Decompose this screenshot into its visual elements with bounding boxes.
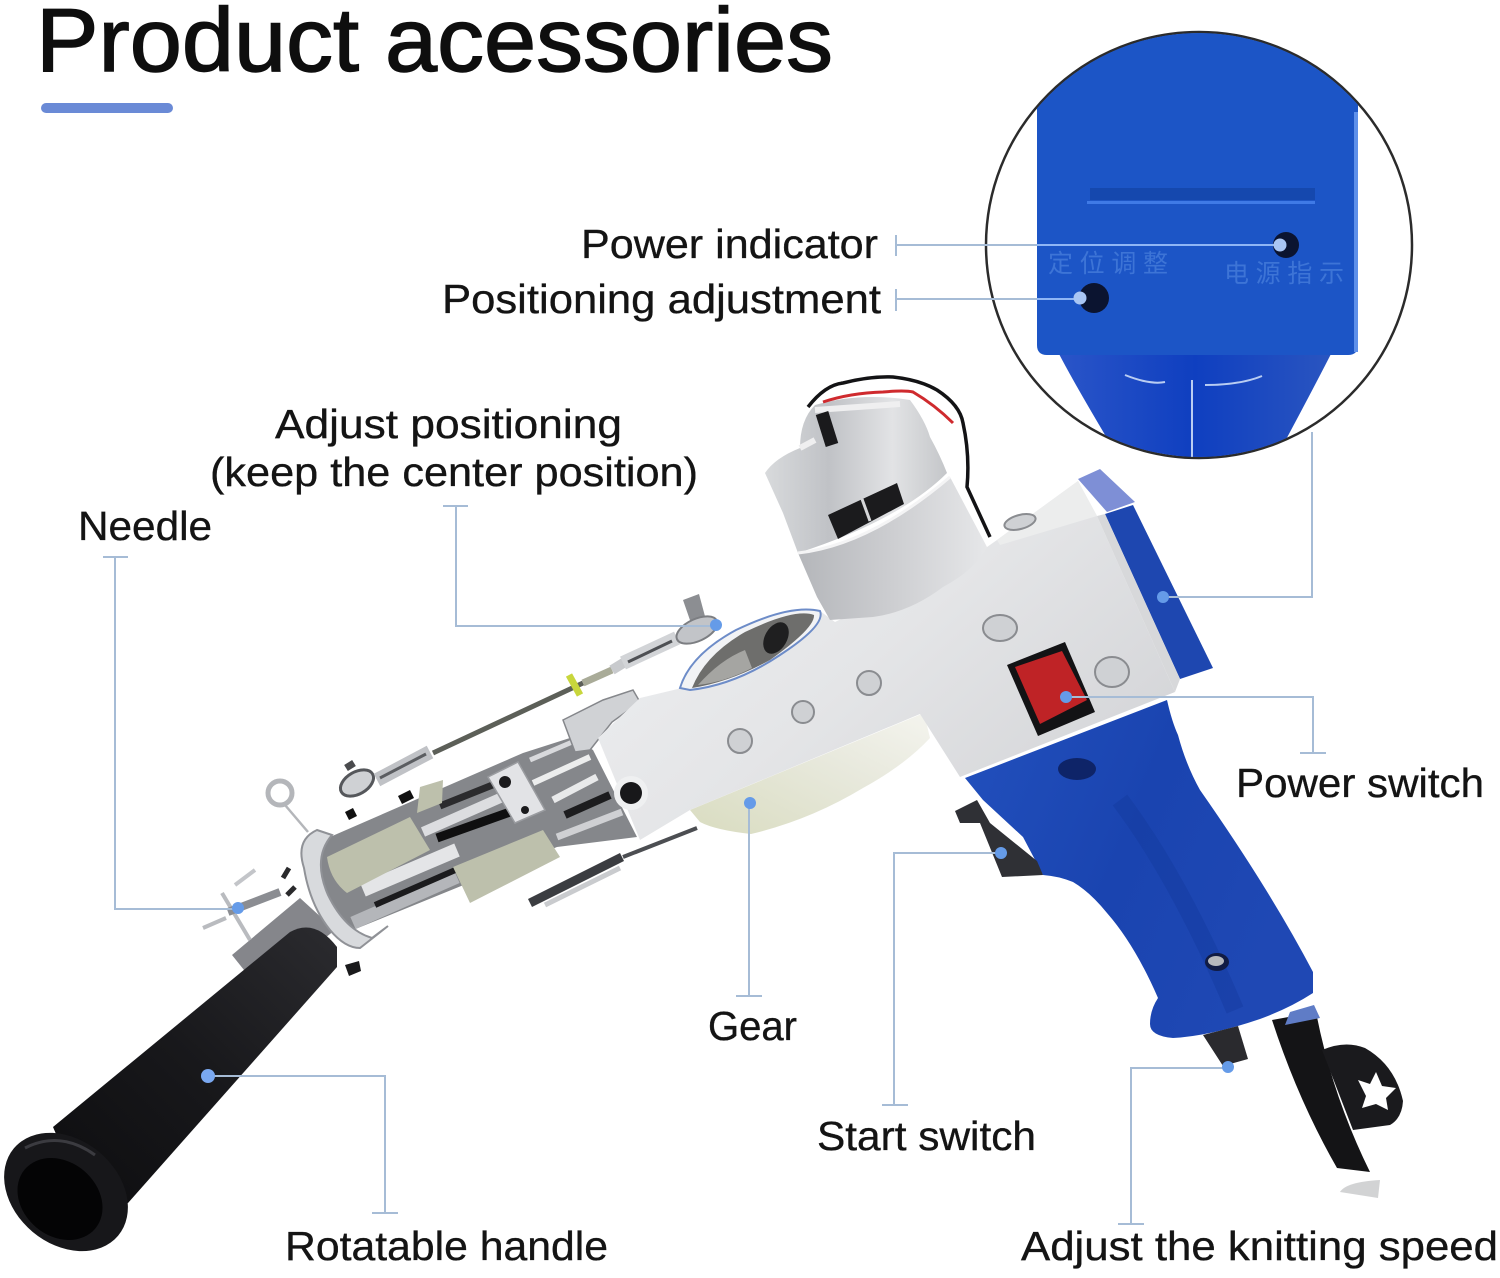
mechanism interior — [317, 737, 637, 930]
beige rollers — [327, 780, 560, 903]
motor — [765, 397, 987, 620]
lower rod — [530, 828, 697, 905]
callout: positioning adjustment — [442, 276, 1086, 322]
callout: start switch — [817, 847, 1036, 1159]
upper rod linkage — [336, 638, 677, 816]
callout: needle — [78, 503, 244, 914]
callout: power switch: Power switch — [1236, 760, 1484, 806]
red power rocker switch — [1007, 642, 1095, 736]
silver housing — [598, 481, 1175, 840]
inset: moulded text — [1049, 250, 1342, 284]
inset: cap slot — [1087, 188, 1315, 204]
adjustment slot — [680, 610, 821, 690]
front mechanism back plate — [232, 898, 335, 990]
inset: right edge highlight — [1354, 112, 1358, 352]
needle assembly — [203, 781, 308, 940]
blue end cap — [1078, 469, 1213, 692]
inset: neck highlights — [1125, 375, 1262, 460]
callout: gear — [708, 797, 797, 1049]
bracket bolt — [614, 776, 648, 810]
callout: gear: Gear — [708, 1003, 797, 1049]
power cord and strain relief — [1203, 1005, 1403, 1198]
callout: positioning adjustment: Positioning adjustment — [442, 276, 882, 322]
callout: inset link — [1157, 432, 1312, 603]
callout: adjust positioning — [210, 401, 722, 631]
callout: power indicator — [581, 221, 1286, 267]
inset: blue cap face — [1037, 20, 1358, 355]
inset: moulded text: 电源指示 — [1224, 260, 1344, 288]
callout: power indicator: Power indicator — [581, 221, 878, 267]
trigger — [955, 800, 1043, 877]
title underline accent — [41, 103, 173, 113]
callout: adjust the knitting speed — [1021, 1061, 1498, 1269]
rotatable black handle — [0, 927, 361, 1276]
housing screws — [728, 511, 1129, 753]
callout: rotatable handle: Rotatable handle — [285, 1223, 608, 1269]
inset: indicator holes — [1079, 232, 1299, 313]
callout: start switch: Start switch — [817, 1113, 1036, 1159]
callout: rotatable handle — [201, 1069, 608, 1269]
adjustment screw — [672, 594, 722, 649]
callout: adjust positioning: (keep the center position) — [210, 449, 698, 495]
clamp block — [488, 762, 545, 823]
callout: needle: Needle — [78, 503, 212, 549]
blue grip — [965, 700, 1313, 1038]
callout: adjust the knitting speed: Adjust the knitting speed — [1021, 1223, 1498, 1269]
callout: adjust positioning: Adjust positioning — [275, 401, 622, 447]
gear wheel — [690, 713, 930, 834]
zoom inset circle — [986, 20, 1412, 460]
mounting bracket — [563, 690, 640, 752]
housing top face — [997, 481, 1097, 545]
front collar ring — [301, 830, 388, 948]
tufting gun illustration — [0, 377, 1403, 1276]
inset: moulded text: 定位调整 — [1048, 250, 1168, 278]
motor wires — [808, 377, 990, 537]
inset: lower neck — [1058, 352, 1332, 460]
callout: power switch — [1060, 691, 1484, 806]
